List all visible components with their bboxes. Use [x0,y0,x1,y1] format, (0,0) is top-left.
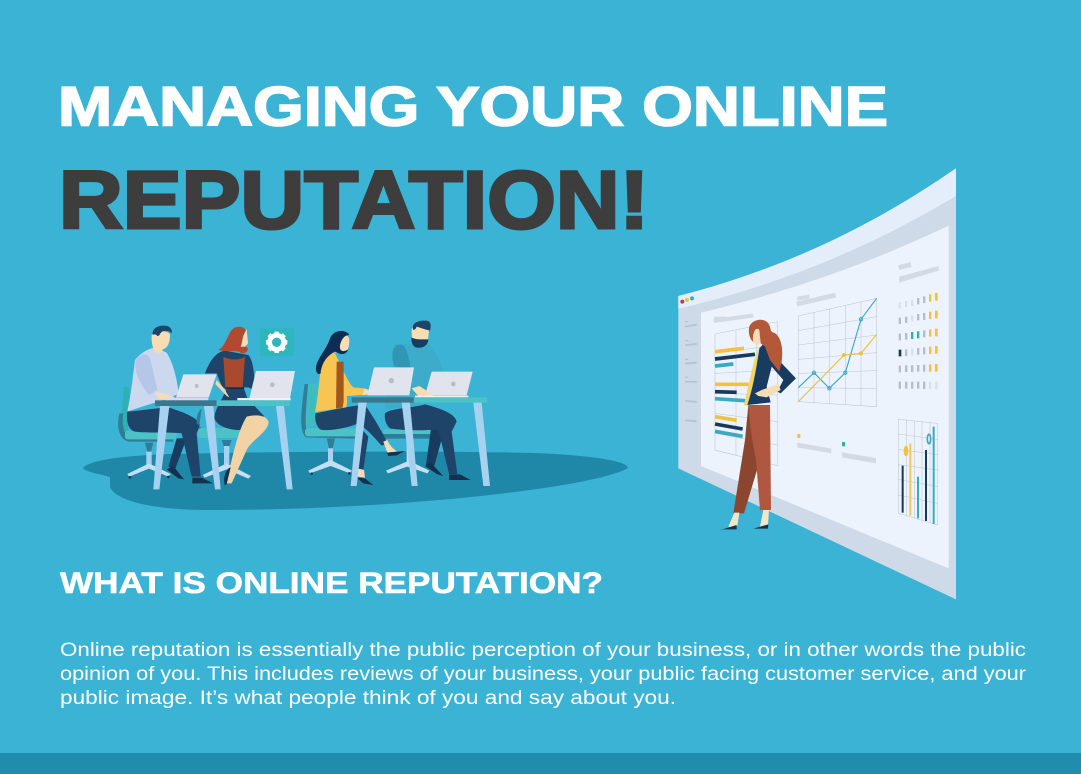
desk with laptops: left [153,371,295,489]
person: woman in navy jacket [197,327,269,485]
body paragraph: Online reputation is essentially the public perception of your business, or in other words the public [60,640,1026,661]
content panel [701,226,949,568]
floor shadow [83,452,628,510]
line chart [796,293,877,407]
window dots [680,296,694,304]
title [58,74,888,246]
screen header strip [678,168,956,309]
person and chair: man in lavender sweater [118,326,213,483]
screen frame [678,168,956,599]
footer band [0,753,1081,774]
desk with laptops: right [351,397,490,486]
person: woman in yellow jacket and man with beard [301,321,473,485]
title: REPUTATION! [59,155,649,246]
left bar chart [713,313,777,466]
legend [797,434,876,463]
body paragraph [60,640,1027,709]
bottom right column chart [898,419,938,525]
title: MANAGING YOUR ONLINE [58,74,888,138]
icon: gear badge [260,328,294,356]
body paragraph: opinion of you. This includes reviews of your business, your public facing customer service, and your [60,664,1027,685]
sidebar labels [685,321,697,422]
presenter woman [718,320,796,531]
body paragraph: public image. It’s what people think of you and say about you. [60,688,676,709]
subheading: WHAT IS ONLINE REPUTATION? [60,567,603,600]
right column indicators [898,262,939,389]
illustration: team working at desks [83,321,628,510]
illustration: analytics dashboard screen with presenter [678,168,956,599]
